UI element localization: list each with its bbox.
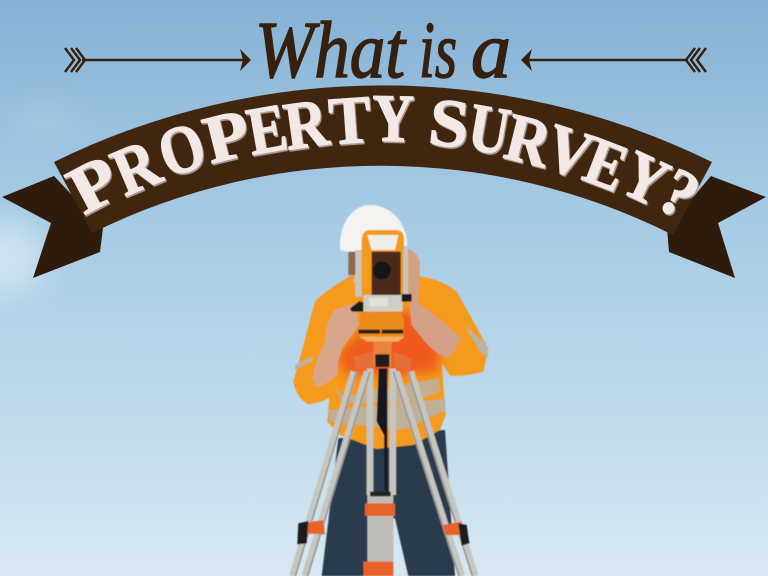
- right forearm and hand: [407, 248, 462, 358]
- arrow: right: [521, 48, 706, 72]
- tripod legs: [293, 368, 475, 576]
- ribbon tail: left: [2, 176, 103, 278]
- trousers: [322, 430, 455, 576]
- left forearm and hand: [313, 303, 359, 388]
- banner title: Property Survey?: P: [196, 95, 258, 179]
- leg clamps: [302, 520, 325, 534]
- banner title: Property Survey?: Y: [371, 80, 415, 156]
- banner title: Property Survey?: [55, 80, 712, 234]
- banner title: Property Survey?: V: [537, 108, 602, 194]
- ribbon band: [54, 85, 712, 235]
- reflective stripes: [295, 325, 488, 430]
- face shadow: [348, 252, 362, 275]
- center column: [367, 495, 393, 576]
- heading: What is a: [255, 7, 511, 95]
- right sleeve: [418, 277, 488, 376]
- hard hat: [340, 205, 407, 253]
- chest highlight: [337, 308, 438, 375]
- banner title: Property Survey?: R: [101, 124, 171, 210]
- ribbon tail: right: [667, 176, 766, 278]
- banner title: Property Survey?: R: [279, 84, 333, 165]
- banner title: Property Survey?: ?: [646, 153, 712, 234]
- banner title: Property Survey?: S: [425, 85, 473, 163]
- heading: What is a: a: [471, 7, 511, 95]
- banner title: Property Survey?: Y: [610, 135, 680, 221]
- theodolite instrument: [350, 230, 412, 342]
- instrument body: [355, 230, 404, 298]
- heading: What is a: is: [419, 7, 457, 95]
- banner title: Property Survey?: R: [498, 98, 559, 182]
- ribbon banner: [2, 80, 766, 278]
- surveyor figure: [293, 205, 488, 576]
- banner title: Property Survey?: U: [463, 90, 515, 170]
- strap: [377, 368, 387, 495]
- heading: What is a: What: [255, 7, 407, 95]
- left sleeve: [293, 273, 355, 404]
- knobs: [350, 294, 412, 312]
- jacket torso: [327, 275, 446, 449]
- tripod leg shading: [295, 372, 472, 576]
- tripod: [293, 342, 475, 576]
- lens: [373, 261, 391, 279]
- arrow: left: [65, 48, 251, 72]
- banner title: Property Survey?: P: [55, 140, 132, 229]
- control panel: [363, 295, 403, 312]
- banner title: Property Survey?: O: [149, 106, 215, 192]
- tripod head: [353, 352, 412, 370]
- instrument base: [359, 312, 404, 338]
- banner title: Property Survey?: E: [575, 122, 638, 207]
- banner title: Property Survey?: E: [241, 89, 292, 170]
- banner title: Property Survey?: T: [326, 82, 374, 160]
